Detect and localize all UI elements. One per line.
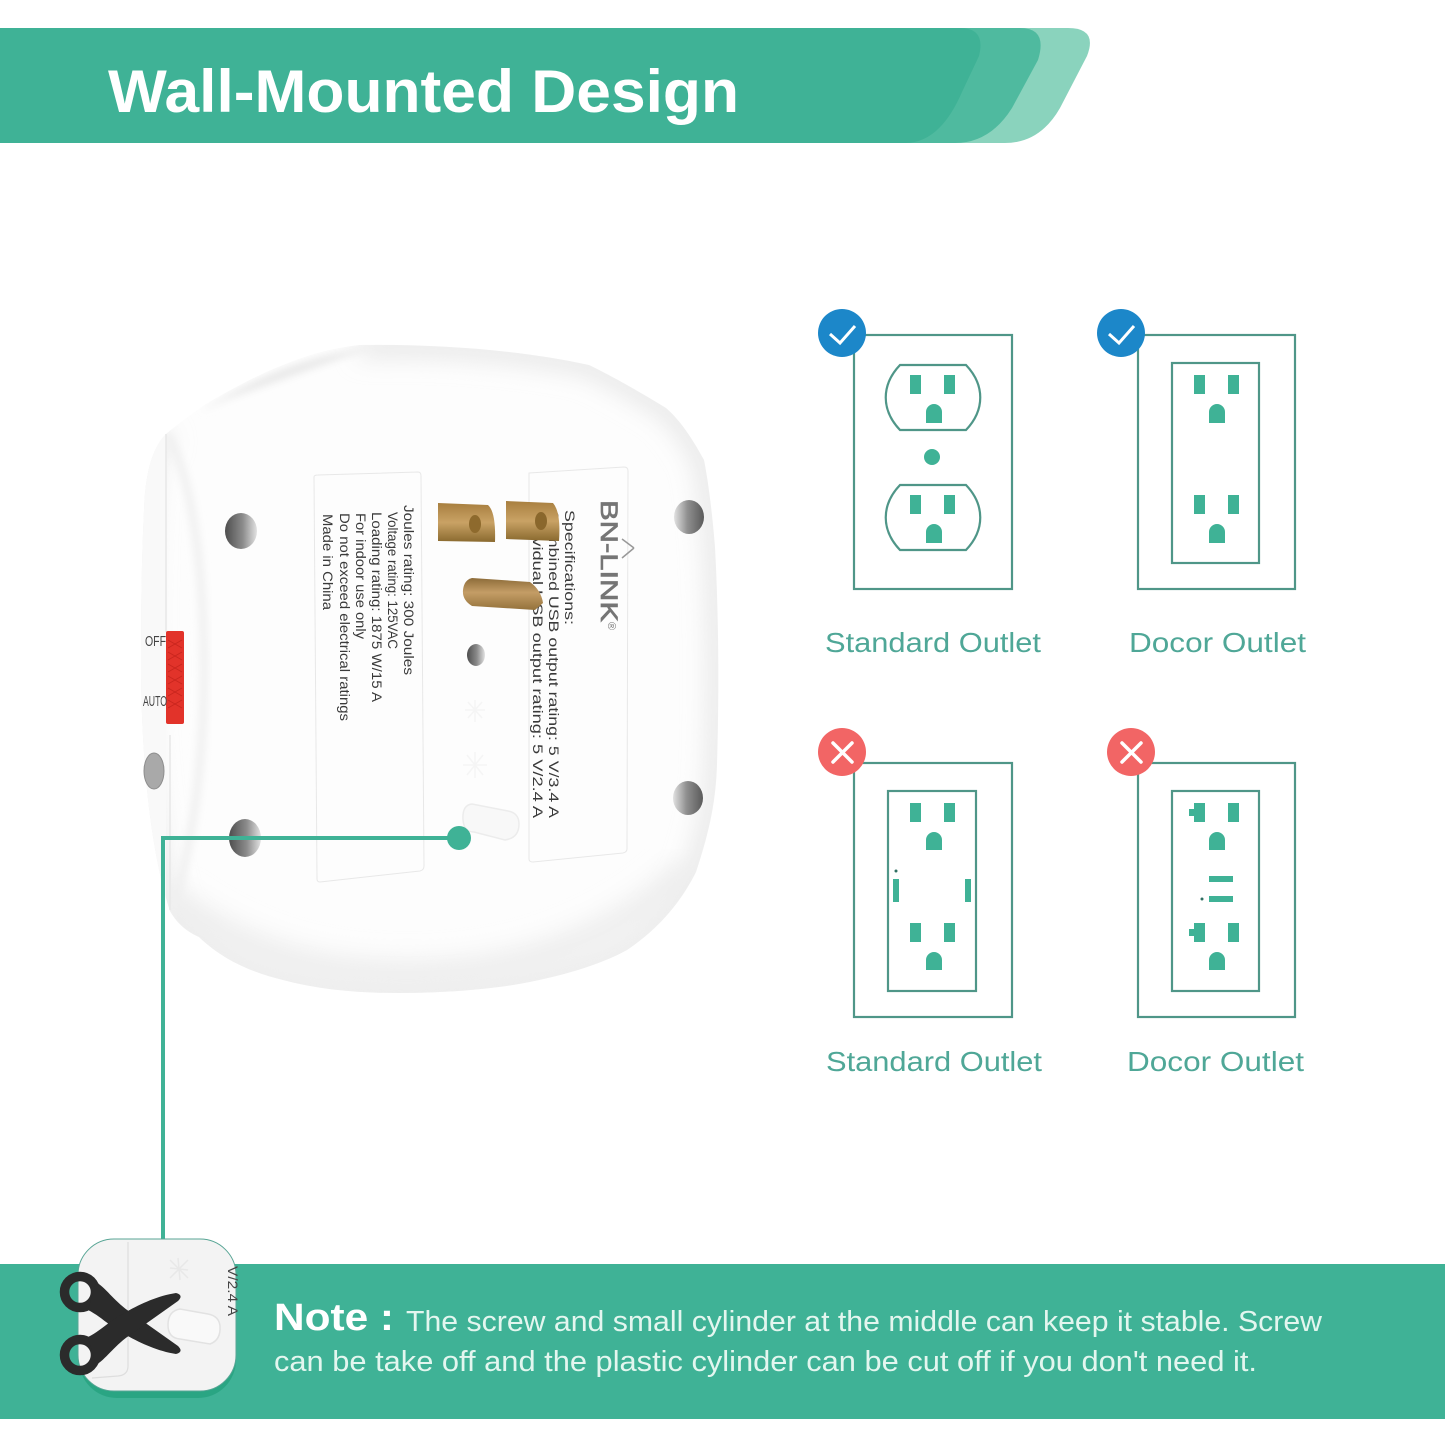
label: ratings sticker: Do not exceed electrical ratings <box>337 513 352 721</box>
label: specifications sticker: Individual USB output rating: 5 V/2.4 A <box>530 508 545 818</box>
label: standard outlet not ok: Standard Outlet <box>826 1046 1042 1077</box>
label: ratings sticker <box>314 472 424 882</box>
light sensor <box>144 753 164 789</box>
upper socket <box>886 365 980 430</box>
check badge <box>818 309 866 357</box>
label: ratings sticker: Loading rating: 1875 W/15 A <box>369 512 384 702</box>
outlet: decor, not compatible <box>1107 728 1295 1017</box>
plastic cylinder <box>463 804 519 840</box>
note text: can be take off and the plastic cylinder can be cut off if you don't need it. <box>274 1346 1257 1378</box>
note band <box>0 1264 1445 1419</box>
note text <box>274 1297 1323 1378</box>
label: ratings sticker: Joules rating: 300 Joules <box>401 505 416 675</box>
mode switch: OFF <box>145 633 166 650</box>
outlet: standard, compatible <box>818 309 1012 589</box>
connector line <box>163 826 471 1242</box>
label: specifications sticker <box>529 467 634 862</box>
note thumbnail with scissors <box>64 1239 241 1398</box>
cross badge <box>818 728 866 776</box>
label: ratings sticker: Made in China <box>320 514 335 611</box>
plastic cylinder detail <box>168 1309 220 1344</box>
plug prongs <box>438 501 559 610</box>
mode switch <box>143 631 184 724</box>
note text: Note : <box>274 1297 394 1339</box>
header banner <box>0 28 1090 143</box>
label: decor outlet not ok: Docor Outlet <box>1127 1046 1304 1077</box>
note thumbnail with scissors: V/2.4 A <box>225 1266 241 1317</box>
device body <box>166 345 718 993</box>
cross badge <box>1107 728 1155 776</box>
mode switch: AUTO <box>143 693 167 710</box>
label: specifications sticker: Combined USB output rating: 5 V/3.4 A <box>546 510 561 818</box>
screw holes <box>225 500 704 857</box>
label: specifications sticker: BN-LINK <box>595 500 622 622</box>
outlet: decor, compatible <box>1097 309 1295 589</box>
outlet: standard, not compatible <box>818 728 1012 1017</box>
label: ratings sticker: Voltage rating: 125VAC <box>385 512 400 649</box>
check badge <box>1097 309 1145 357</box>
label: standard outlet ok: Standard Outlet <box>825 627 1041 658</box>
title: Wall-Mounted Design <box>108 58 739 125</box>
label: ratings sticker: For indoor use only <box>353 513 368 639</box>
product: back of surge protector <box>130 335 730 1005</box>
icon: scissors <box>64 1276 181 1370</box>
label: decor outlet ok: Docor Outlet <box>1129 627 1306 658</box>
label: specifications sticker: ® <box>605 622 617 630</box>
side flange seam <box>166 434 170 910</box>
label: specifications sticker: Specifications: <box>562 510 577 625</box>
note text: The screw and small cylinder at the middle can keep it stable. Screw <box>406 1306 1323 1338</box>
faint embossed marks <box>463 700 487 778</box>
